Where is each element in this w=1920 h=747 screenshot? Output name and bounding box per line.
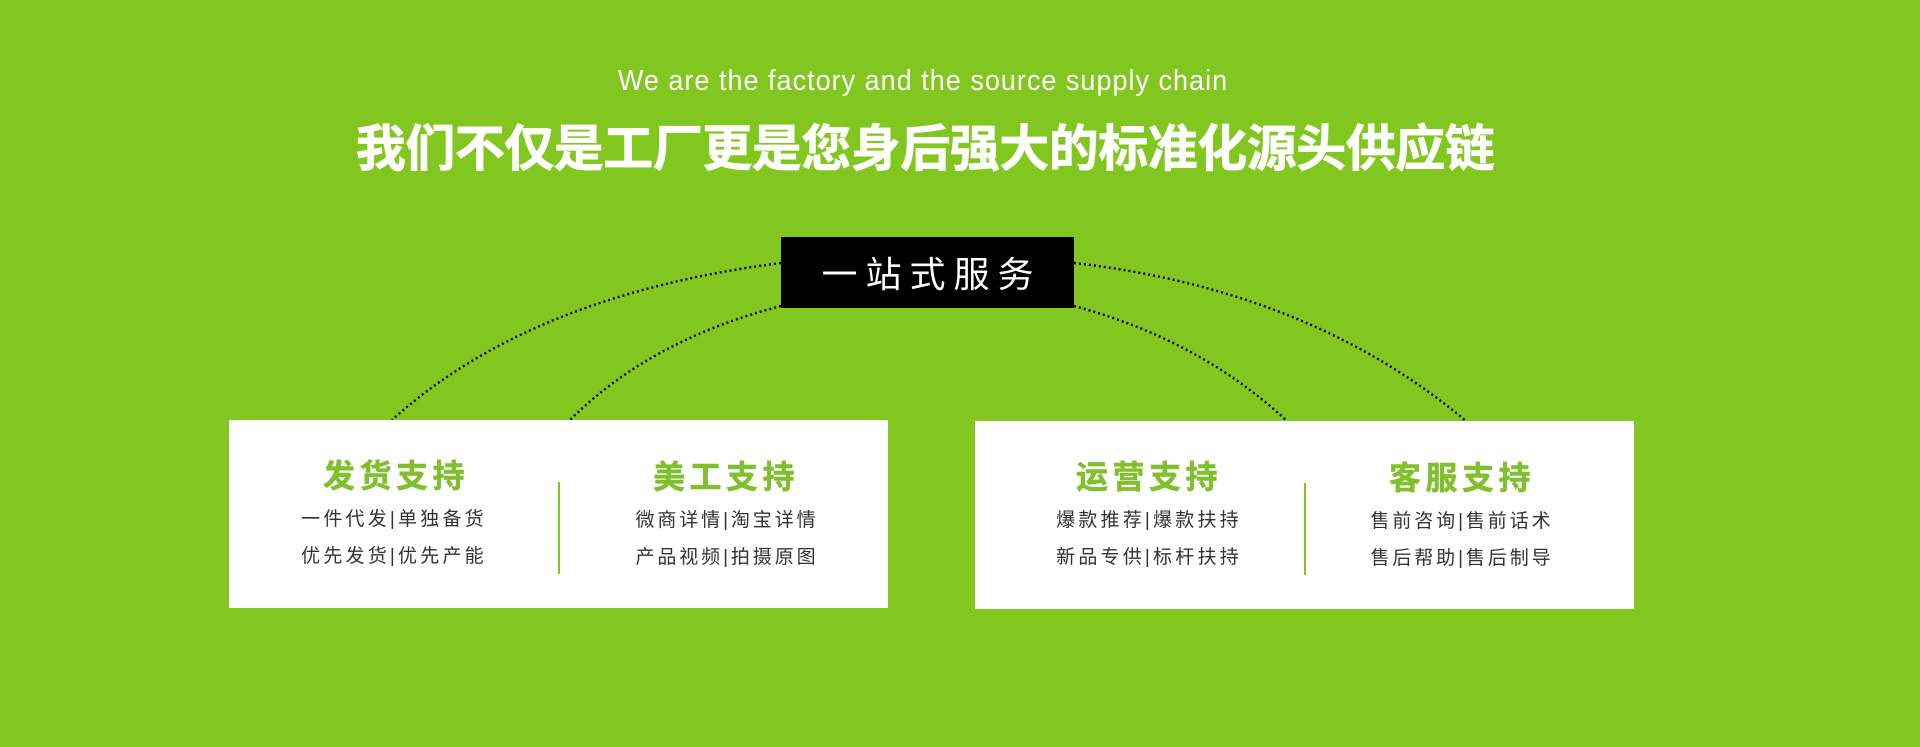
title: 我们不仅是工厂更是您身后强大的标准化源头供应链 xyxy=(356,121,1494,177)
text: art line 2: 产品视频|拍摄原图 xyxy=(635,547,819,568)
divider xyxy=(1304,483,1306,575)
heading: shipping support: 发货支持 xyxy=(323,458,469,494)
subtitle: We are the factory and the source supply chain xyxy=(618,65,1228,97)
panel: operations and customer service support xyxy=(975,421,1634,609)
text: operations line 1: 爆款推荐|爆款扶持 xyxy=(1056,510,1242,531)
service box: 一站式服务 xyxy=(821,254,1042,295)
heading: customer service support: 客服支持 xyxy=(1389,460,1535,496)
text: customer service line 1: 售前咨询|售前话术 xyxy=(1370,511,1554,532)
text: shipping line 1: 一件代发|单独备货 xyxy=(301,509,487,530)
text: shipping line 2: 优先发货|优先产能 xyxy=(301,546,487,567)
panel: shipping and art support xyxy=(229,420,888,608)
divider xyxy=(558,482,560,574)
text: art line 1: 微商详情|淘宝详情 xyxy=(635,510,819,531)
text: operations line 2: 新品专供|标杆扶持 xyxy=(1056,547,1242,568)
heading: operations support: 运营支持 xyxy=(1076,459,1222,495)
text: customer service line 2: 售后帮助|售后制导 xyxy=(1370,548,1554,569)
service box xyxy=(781,237,1074,308)
heading: art support: 美工支持 xyxy=(653,459,799,495)
